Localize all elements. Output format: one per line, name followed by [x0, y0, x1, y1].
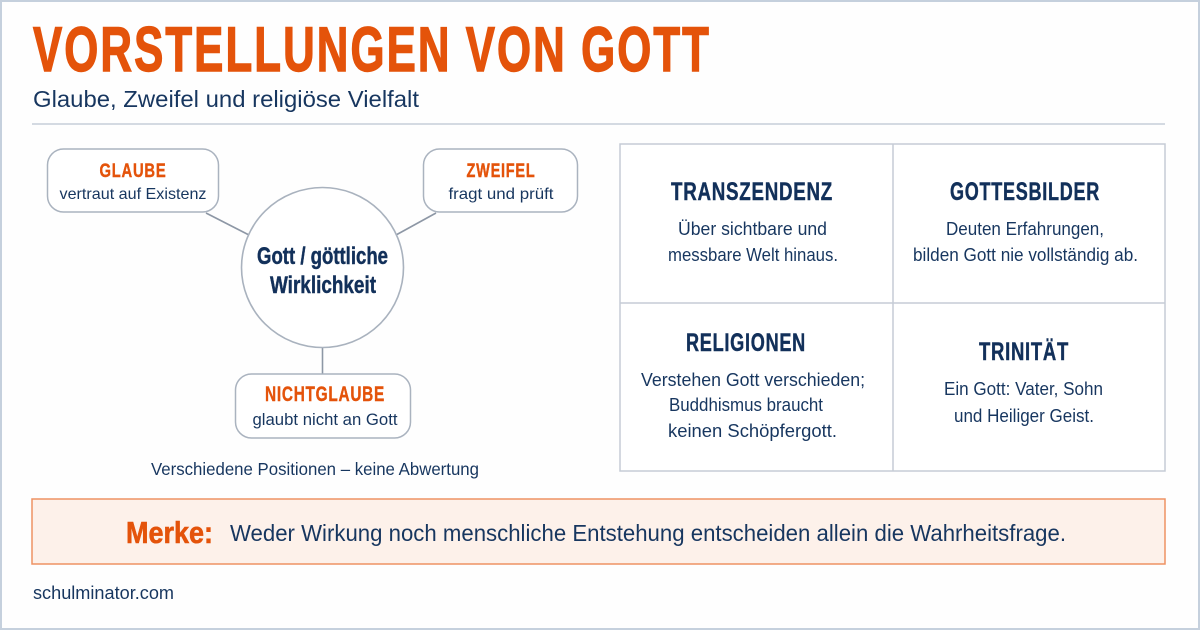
cell: Gottesbilder: GOTTESBILDER: [950, 178, 1100, 206]
connector: Zweifel to centre: [396, 213, 436, 235]
box: Zweifel: [424, 149, 578, 212]
box: Glaube: [48, 149, 218, 212]
cell: Religionen: RELIGIONEN: [686, 329, 806, 357]
diagram caption: Verschiedene Positionen – keine Abwertung: [151, 459, 479, 479]
box: Glaube: GLAUBE: [100, 161, 166, 182]
central circle: Gott / göttliche: [257, 243, 388, 270]
cell: Trinität: Ein Gott: Vater, Sohn: [944, 379, 1103, 399]
cell: Transzendenz: messbare Welt hinaus.: [668, 245, 838, 265]
box: Nichtglaube: glaubt nicht an Gott: [252, 411, 398, 429]
connector: Glaube to centre: [206, 213, 249, 235]
cell: Trinität: TRINITÄT: [979, 338, 1069, 366]
callout: Merke: Merke:: [126, 515, 213, 550]
callout: Merke: [32, 499, 1165, 564]
box: Zweifel: ZWEIFEL: [466, 161, 536, 182]
panel: concept grid: [620, 144, 1165, 471]
cell: Religionen: Verstehen Gott verschieden;: [641, 370, 865, 390]
box: Nichtglaube: [236, 374, 410, 438]
cell: Transzendenz: TRANSZENDENZ: [671, 178, 833, 206]
central circle: [242, 188, 404, 348]
panel: concept diagram: [48, 149, 578, 479]
central circle: Wirklichkeit: [270, 272, 376, 299]
cell: Religionen: [641, 329, 865, 441]
connector: Nichtglaube to centre: [322, 347, 324, 374]
subtitle: Glaube, Zweifel und religiöse Vielfalt: [33, 86, 420, 112]
box: Nichtglaube: NICHTGLAUBE: [265, 383, 385, 406]
cell: Trinität: [944, 338, 1103, 426]
cell: Religionen: keinen Schöpfergott.: [668, 421, 837, 441]
cell: Trinität: und Heiliger Geist.: [954, 406, 1094, 426]
box: Glaube: vertraut auf Existenz: [60, 186, 206, 203]
cell: Gottesbilder: bilden Gott nie vollständig ab.: [913, 245, 1138, 265]
box: Zweifel: fragt und prüft: [448, 186, 554, 203]
cell: Transzendenz: Über sichtbare und: [678, 219, 827, 239]
footer source: schulminator.com: [33, 583, 174, 603]
title: VORSTELLUNGEN VON GOTT: [33, 15, 711, 85]
cell: Transzendenz: [668, 178, 838, 265]
cell: Gottesbilder: Deuten Erfahrungen,: [946, 219, 1104, 239]
cell: Religionen: Buddhismus braucht: [669, 395, 823, 415]
callout: Merke: Weder Wirkung noch menschliche Entstehung entscheiden allein die Wahrheitsfrage.: [230, 520, 1066, 546]
cell: Gottesbilder: [913, 178, 1138, 265]
